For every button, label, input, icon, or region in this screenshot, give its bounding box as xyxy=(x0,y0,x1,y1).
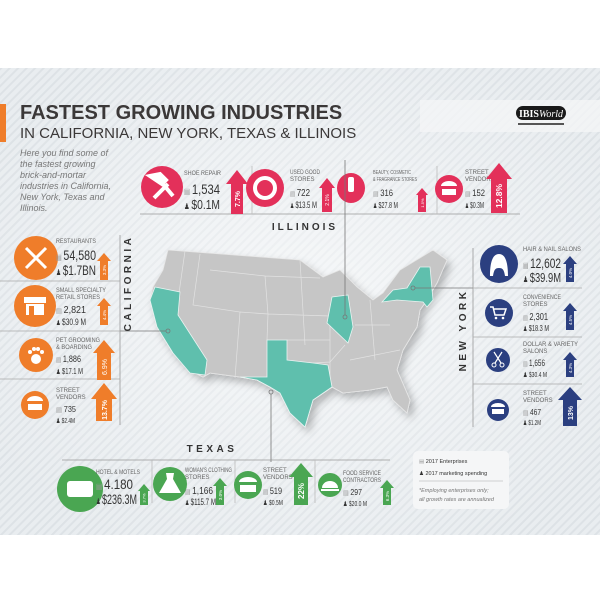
item: street vendors TX: STREET xyxy=(263,468,287,474)
item: convenience stores: ♟ $18.3 M xyxy=(523,324,549,333)
item: woman's clothing: 3.0% xyxy=(218,490,223,500)
item: dollar & variety: ▤ 1,656 xyxy=(523,358,545,368)
item: used good stores: ▤ 722 xyxy=(290,188,310,199)
item: street vendors CA: VENDORS xyxy=(56,395,86,401)
item: hair & nail salons: 4.0% xyxy=(568,268,573,278)
item: convenience stores: 4.5% xyxy=(568,315,573,325)
intro text: Illinois. xyxy=(20,203,48,213)
state: new york xyxy=(382,267,433,307)
item: street vendors TX xyxy=(234,463,313,507)
panel: california xyxy=(0,235,134,425)
heading: illinois: ILLINOIS xyxy=(272,222,338,233)
item: street vendors NY xyxy=(487,387,582,427)
item: street vendors NY: 13% xyxy=(568,405,575,420)
intro text: Here you find some of xyxy=(20,148,110,158)
item: restaurants: ▤ 54,580 xyxy=(56,247,96,263)
item: woman's clothing xyxy=(153,467,232,507)
item: street vendors CA: STREET xyxy=(56,388,80,394)
legend: *Employing enterprises only; xyxy=(419,488,489,494)
item: hotel & motels: HOTEL & MOTELS xyxy=(96,470,140,476)
item: shoe repair xyxy=(141,166,248,214)
item: shoe repair: ♟ $0.1M xyxy=(184,197,220,212)
item: used good stores: ♟ $13.5 M xyxy=(290,200,317,210)
item: hair & nail salons: HAIR & NAIL SALONS xyxy=(523,247,581,253)
title: IN CALIFORNIA, NEW YORK, TEXAS & ILLINOIS xyxy=(20,125,356,142)
item: pet grooming: ▤ 1,886 xyxy=(56,354,81,364)
item: used good stores xyxy=(246,169,335,212)
item: small specialty retail: ♟ $30.9 M xyxy=(56,317,86,327)
item: hotel & motels: ▤ 4.180 xyxy=(96,476,133,492)
item: pet grooming: & BOARDING xyxy=(56,345,92,351)
item: restaurants: RESTAURANTS xyxy=(56,239,96,245)
title: FASTEST GROWING INDUSTRIES xyxy=(20,102,342,124)
panel: texas xyxy=(57,460,394,512)
item: street vendors NY: VENDORS xyxy=(523,398,553,404)
item: street vendors IL: VENDORS xyxy=(465,177,495,183)
intro text: industries in California, xyxy=(20,181,111,191)
state: illinois xyxy=(327,295,353,343)
item: food service contractors: CONTRACTORS xyxy=(343,478,381,484)
title xyxy=(20,102,356,142)
item: dollar & variety: 4.3% xyxy=(568,363,573,373)
item: food service contractors xyxy=(318,471,394,508)
item: convenience stores: CONVENIENCE xyxy=(523,295,561,301)
item: woman's clothing: ▤ 1,166 xyxy=(185,486,213,497)
item: street vendors CA: ▤ 735 xyxy=(56,405,76,414)
item: shoe repair: SHOE REPAIR xyxy=(184,171,222,177)
item: food service contractors: ▤ 297 xyxy=(343,488,362,497)
item: street vendors TX: ▤ 519 xyxy=(263,486,282,496)
item: street vendors TX: 22% xyxy=(297,483,306,499)
item: street vendors IL: ▤ 152 xyxy=(465,188,485,198)
item: small specialty retail xyxy=(14,285,111,327)
intro text: the fastest growing xyxy=(20,159,96,169)
item: beauty stores: ▤ 316 xyxy=(373,188,393,198)
legend xyxy=(413,451,509,509)
item: woman's clothing: ♟ $115.7 M xyxy=(185,497,216,507)
item: street vendors NY: ▤ 467 xyxy=(523,408,541,417)
item: pet grooming: 6.9% xyxy=(102,359,109,375)
item: small specialty retail: SMALL SPECIALTY xyxy=(56,288,106,294)
item: woman's clothing: WOMAN'S CLOTHING xyxy=(185,468,232,474)
item: beauty stores: ♟ $27.8 M xyxy=(373,201,398,210)
item: hair & nail salons xyxy=(480,245,581,285)
item: pet grooming: ♟ $17.1 M xyxy=(56,367,83,376)
state: texas xyxy=(240,340,332,427)
item: used good stores: USED GOOD xyxy=(290,170,321,176)
item: street vendors TX: VENDORS xyxy=(263,475,293,481)
item: woman's clothing: STORES xyxy=(185,475,210,481)
item: small specialty retail: RETAIL STORES xyxy=(56,295,100,301)
logo: IBISWorld xyxy=(516,106,566,125)
background panel xyxy=(0,68,600,535)
item: street vendors CA: 13.7% xyxy=(102,399,109,420)
item: street vendors CA: ♟ $2.4M xyxy=(56,417,75,425)
item: convenience stores xyxy=(485,295,577,333)
item: hotel & motels xyxy=(57,466,150,512)
item: pet grooming: PET GROOMING xyxy=(56,338,100,344)
item: beauty stores xyxy=(337,170,428,212)
legend: ♟ 2017 marketing spending xyxy=(419,470,487,477)
item: shoe repair: ▤ 1,534 xyxy=(184,181,220,197)
intro text: New York, Texas and xyxy=(20,192,106,202)
item: hair & nail salons: ▤ 12,602 xyxy=(523,255,561,271)
intro text: brick-and-mortar xyxy=(20,170,87,180)
panel: new york xyxy=(458,245,582,427)
item: hair & nail salons: ♟ $39.9M xyxy=(523,270,561,285)
item: dollar & variety: DOLLAR & VARIETY xyxy=(523,342,578,348)
map xyxy=(120,160,473,462)
heading: texas: TEXAS xyxy=(187,444,237,455)
state: california xyxy=(150,287,207,375)
item: street vendors IL: ♟ $0.3M xyxy=(465,201,484,210)
item: small specialty retail: ▤ 2,821 xyxy=(56,305,86,316)
item: food service contractors: FOOD SERVICE xyxy=(343,471,381,477)
item: restaurants: 3.3% xyxy=(102,265,107,275)
intro text xyxy=(20,148,111,213)
item: beauty stores: 1.5% xyxy=(420,198,425,208)
item: beauty stores: BEAUTY, COSMETIC xyxy=(373,170,411,176)
item: dollar & variety xyxy=(486,342,578,379)
item: dollar & variety: SALONS xyxy=(523,349,547,355)
item: restaurants xyxy=(14,236,111,280)
item: pet grooming xyxy=(19,338,115,380)
item: used good stores: 2.1% xyxy=(325,194,331,206)
logo band xyxy=(420,100,600,132)
item: convenience stores: STORES xyxy=(523,302,548,308)
item: street vendors NY: ♟ $1.2M xyxy=(523,419,541,427)
item: street vendors NY: STREET xyxy=(523,391,547,397)
item: small specialty retail: 4.4% xyxy=(102,310,107,320)
item: restaurants: ♟ $1.7BN xyxy=(56,262,96,278)
item: street vendors TX: ♟ $0.5M xyxy=(263,499,283,507)
legend: all growth rates are annualized xyxy=(419,497,495,503)
legend: ▤ 2017 Enterprises xyxy=(419,459,468,465)
item: used good stores: STORES xyxy=(290,177,315,183)
item: street vendors IL: 12.8% xyxy=(494,184,504,208)
item: street vendors IL xyxy=(435,163,512,213)
item: hotel & motels: 3.7% xyxy=(142,493,146,503)
panel: illinois xyxy=(140,163,520,214)
item: shoe repair: 7.7% xyxy=(235,190,242,207)
item: food service contractors: 6.3% xyxy=(385,491,390,501)
panel: new york: NEW YORK xyxy=(458,289,469,371)
accent bar xyxy=(0,104,6,142)
item: food service contractors: ♟ $20.0 M xyxy=(343,500,367,508)
item: hotel & motels: ♟ $236.3M xyxy=(96,491,137,507)
logo: IBISWorld: IBISWorld xyxy=(519,109,564,120)
item: convenience stores: ▤ 2,301 xyxy=(523,312,548,323)
item: dollar & variety: ♟ $30.4 M xyxy=(523,371,547,379)
item: beauty stores: & FRAGRANCE STORES xyxy=(373,177,417,183)
item: street vendors IL: STREET xyxy=(465,170,489,176)
panel: california: CALIFORNIA xyxy=(123,235,134,331)
item: street vendors CA xyxy=(21,383,117,425)
